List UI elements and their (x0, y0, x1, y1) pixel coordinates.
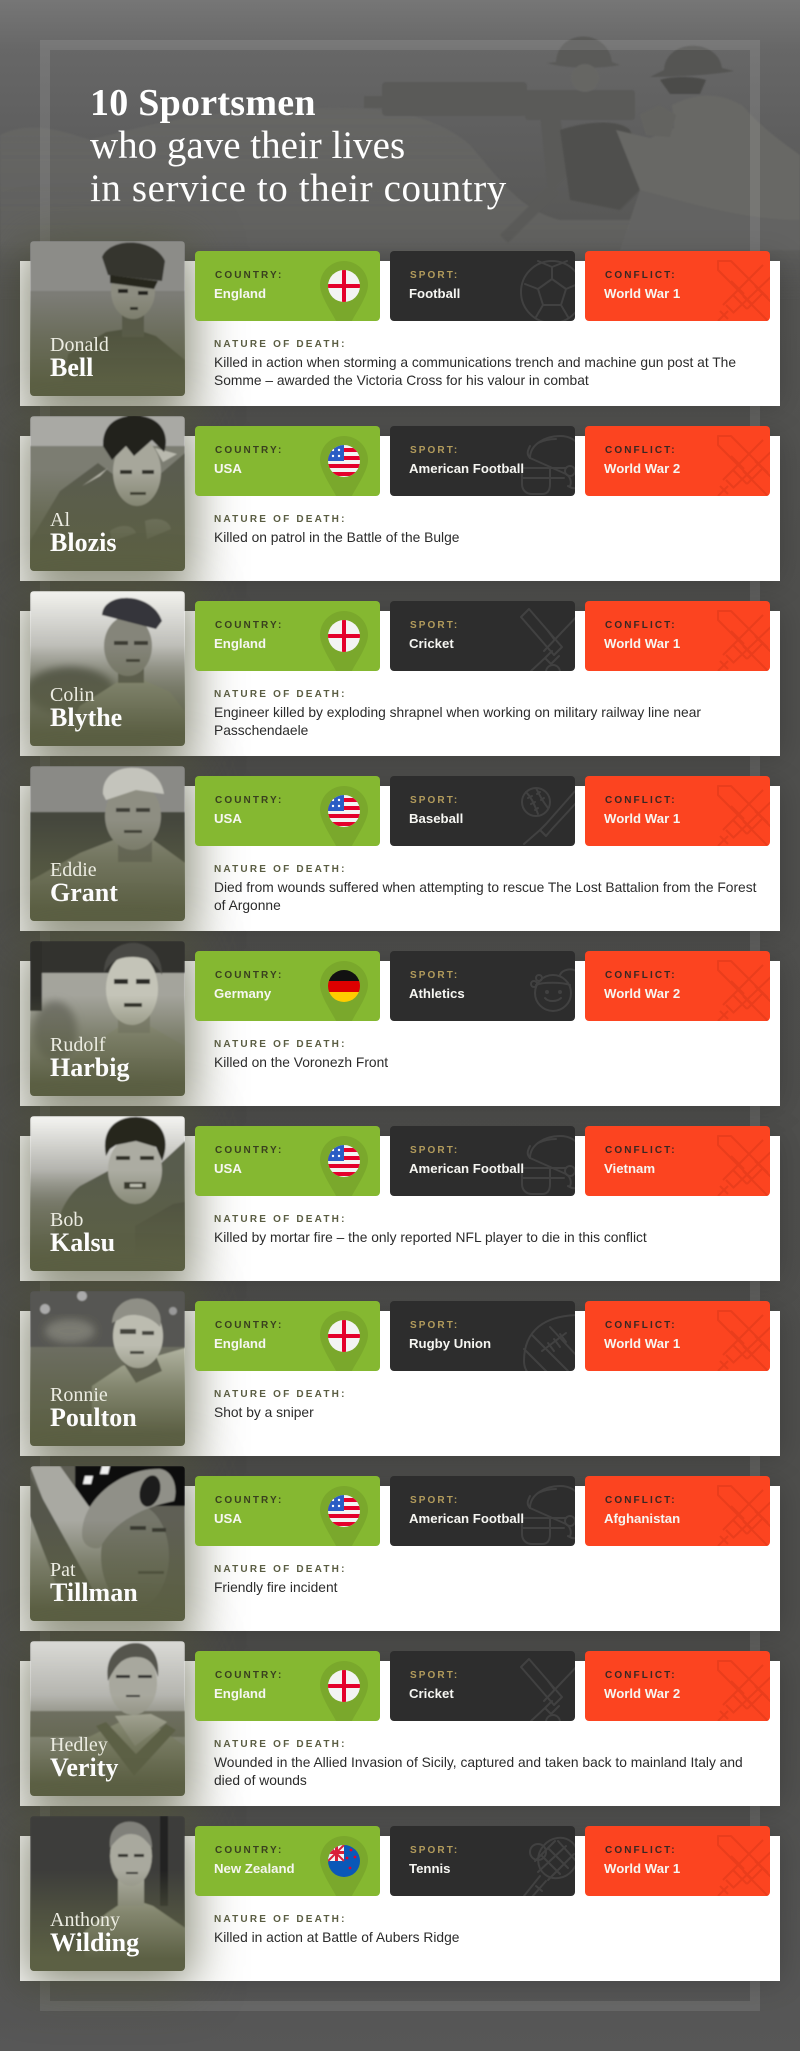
nature of death label: NATURE OF DEATH: (214, 514, 347, 525)
portrait: Rudolf Harbig: Harbig (50, 1053, 129, 1082)
machine gun (364, 82, 635, 243)
conflict tile: World War 1 (604, 636, 680, 651)
soldier one (547, 36, 650, 210)
portrait: Donald Bell (30, 241, 185, 396)
sport tile: Tennis (409, 1861, 451, 1876)
panel: Ronnie Poulton (10, 1266, 782, 1466)
portrait: Anthony Wilding (30, 1816, 185, 1971)
title: in service to their country (90, 167, 507, 210)
country tile: COUNTRY: (215, 445, 283, 456)
sport tile: Cricket (409, 1686, 454, 1701)
sport tile: Rugby Union (409, 1336, 491, 1351)
nature of death text: Died from wounds suffered when attempting to rescue The Lost Battalion from the Forest (214, 880, 756, 895)
conflict tile: CONFLICT: (605, 445, 677, 456)
conflict tile: World War 1 (604, 286, 680, 301)
conflict tile: CONFLICT: (605, 1145, 677, 1156)
country tile (195, 1476, 380, 1546)
background photograph: machine gun soldiers (0, 36, 800, 252)
conflict tile: CONFLICT: (605, 795, 677, 806)
panel: Bob Kalsu (10, 1080, 782, 1291)
country tile: Germany (214, 986, 271, 1001)
conflict tile (585, 426, 770, 496)
country tile (195, 1126, 380, 1196)
portrait: Pat Tillman (30, 1466, 185, 1621)
country tile (195, 601, 380, 671)
sport tile (390, 1476, 575, 1546)
sport tile (390, 426, 575, 496)
name: Colin (50, 684, 94, 706)
conflict tile (585, 951, 770, 1021)
nature of death text: Killed on the Voronezh Front (214, 1055, 388, 1070)
sport tile (390, 1651, 575, 1721)
conflict tile: CONFLICT: (605, 970, 677, 981)
country tile (195, 951, 380, 1021)
nature of death label: NATURE OF DEATH: (214, 1214, 347, 1225)
nature of death label: NATURE OF DEATH: (214, 864, 347, 875)
name: Hedley (50, 1734, 108, 1756)
nature of death text: Wounded in the Allied Invasion of Sicily, captured and taken back to mainland Italy and (214, 1755, 743, 1770)
nature of death text: Passchendaele (214, 723, 308, 738)
panel: Pat Tillman (10, 1441, 781, 1641)
country tile: England (214, 286, 266, 301)
sport tile: Athletics (409, 986, 465, 1001)
conflict tile: CONFLICT: (605, 1320, 677, 1331)
portrait: Donald Bell: Bell (50, 353, 93, 382)
country tile: COUNTRY: (215, 1495, 283, 1506)
conflict tile (585, 601, 770, 671)
title (90, 82, 507, 210)
nature of death label: NATURE OF DEATH: (214, 1039, 347, 1050)
title: 10 Sportsmen (90, 82, 316, 124)
sport tile: SPORT: (410, 1495, 459, 1506)
nature of death text (214, 355, 736, 388)
name: Eddie (50, 859, 97, 881)
conflict tile: World War 1 (604, 811, 680, 826)
panel: Donald Bell (6, 225, 783, 416)
panel: Eddie Grant (10, 730, 782, 941)
sport tile: Football (409, 286, 460, 301)
country tile: COUNTRY: (215, 620, 283, 631)
name: Ronnie (50, 1384, 108, 1406)
name: Al (50, 509, 70, 531)
country tile: England (214, 1686, 266, 1701)
nature of death label: NATURE OF DEATH: (214, 339, 347, 350)
conflict tile (585, 1826, 770, 1896)
name: Anthony (50, 1909, 120, 1931)
portrait: Ronnie Poulton (30, 1291, 185, 1446)
portrait: Ronnie Poulton: Poulton (50, 1403, 137, 1432)
nature of death text: Engineer killed by exploding shrapnel when working on military railway line near (214, 705, 701, 720)
sport tile: Baseball (409, 811, 463, 826)
portrait: Anthony Wilding: Wilding (50, 1928, 139, 1957)
nature of death text: Shot by a sniper (214, 1405, 314, 1420)
conflict tile: CONFLICT: (605, 1670, 677, 1681)
sport tile (390, 1301, 575, 1371)
sport tile (390, 776, 575, 846)
country tile: COUNTRY: (215, 270, 283, 281)
conflict tile: CONFLICT: (605, 1495, 677, 1506)
portrait: Al Blozis (30, 416, 185, 571)
country tile (195, 1651, 380, 1721)
nature of death label: NATURE OF DEATH: (214, 1389, 347, 1400)
nature of death text: Killed in action when storming a communications trench and machine gun post at The (214, 355, 736, 370)
sport tile (390, 251, 575, 321)
conflict tile: World War 2 (604, 986, 680, 1001)
country tile: USA (214, 1161, 242, 1176)
panel: Colin Blythe (10, 566, 782, 766)
portrait: Hedley Verity (30, 1641, 185, 1796)
country tile: COUNTRY: (215, 1145, 283, 1156)
country tile: COUNTRY: (215, 1670, 283, 1681)
conflict tile: World War 1 (604, 1861, 680, 1876)
country tile: USA (214, 1511, 242, 1526)
country tile (195, 426, 380, 496)
country tile: COUNTRY: (215, 1320, 283, 1331)
panel: Al Blozis (9, 391, 782, 591)
sport tile: SPORT: (410, 445, 459, 456)
country tile: USA (214, 461, 242, 476)
portrait: Colin Blythe (30, 591, 185, 746)
country tile: England (214, 636, 266, 651)
conflict tile (585, 1651, 770, 1721)
conflict tile (585, 1301, 770, 1371)
country tile (195, 1826, 380, 1896)
nature of death text: Friendly fire incident (214, 1580, 337, 1595)
portrait: Bob Kalsu: Kalsu (50, 1228, 115, 1257)
conflict tile (585, 1126, 770, 1196)
portrait: Colin Blythe: Blythe (50, 703, 122, 732)
nature of death label: NATURE OF DEATH: (214, 1564, 347, 1575)
sport tile: American Football (409, 461, 524, 476)
title: who gave their lives (90, 124, 405, 167)
nature of death text: Killed in action at Battle of Aubers Ridge (214, 1930, 459, 1945)
panel: Rudolf Harbig (10, 916, 782, 1116)
nature of death text: Killed on patrol in the Battle of the Bulge (214, 530, 459, 545)
nature of death text: of Argonne (214, 898, 281, 913)
conflict tile: CONFLICT: (605, 270, 677, 281)
nature of death text: Killed by mortar fire – the only reported NFL player to die in this conflict (214, 1230, 647, 1245)
portrait: Pat Tillman: Tillman (50, 1578, 138, 1607)
sport tile (390, 951, 575, 1021)
name: Bob (50, 1209, 83, 1231)
conflict tile (585, 251, 770, 321)
country tile: COUNTRY: (215, 1845, 283, 1856)
sport tile: American Football (409, 1161, 524, 1176)
sport tile: SPORT: (410, 270, 459, 281)
conflict tile: CONFLICT: (605, 620, 677, 631)
portrait: Hedley Verity: Verity (50, 1753, 118, 1782)
portrait: Eddie Grant: Grant (50, 878, 118, 907)
conflict tile: World War 2 (604, 461, 680, 476)
nature of death label: NATURE OF DEATH: (214, 1914, 347, 1925)
conflict tile: World War 1 (604, 1336, 680, 1351)
sport tile: SPORT: (410, 620, 459, 631)
name: Donald (50, 334, 109, 356)
country tile (195, 776, 380, 846)
panel: Hedley Verity (10, 1616, 782, 1816)
name: Pat (50, 1559, 76, 1581)
conflict tile: Afghanistan (604, 1511, 680, 1526)
sport tile (390, 1826, 575, 1896)
country tile: COUNTRY: (215, 795, 283, 806)
nature of death label: NATURE OF DEATH: (214, 1739, 347, 1750)
nature of death text (214, 705, 701, 738)
sport tile: SPORT: (410, 970, 459, 981)
sport tile: SPORT: (410, 1845, 459, 1856)
nature of death text (214, 880, 756, 913)
country tile: COUNTRY: (215, 970, 283, 981)
conflict tile: CONFLICT: (605, 1845, 677, 1856)
portrait: Eddie Grant (30, 766, 185, 921)
country tile (195, 251, 380, 321)
panel: Anthony Wilding (6, 1780, 782, 2006)
country tile: New Zealand (214, 1861, 295, 1876)
sport tile: SPORT: (410, 1670, 459, 1681)
sport tile: American Football (409, 1511, 524, 1526)
conflict tile: Vietnam (604, 1161, 655, 1176)
sport tile (390, 601, 575, 671)
nature of death text (214, 1755, 743, 1788)
name: Rudolf (50, 1034, 106, 1056)
sport tile: SPORT: (410, 1320, 459, 1331)
portrait: Bob Kalsu (30, 1116, 185, 1271)
nature of death label: NATURE OF DEATH: (214, 689, 347, 700)
trench hills (0, 108, 800, 300)
sport tile (390, 1126, 575, 1196)
portrait: Al Blozis: Blozis (50, 528, 116, 557)
sport tile: Cricket (409, 636, 454, 651)
country tile: USA (214, 811, 242, 826)
country tile: England (214, 1336, 266, 1351)
nature of death text: died of wounds (214, 1773, 307, 1788)
sport tile: SPORT: (410, 795, 459, 806)
conflict tile: World War 2 (604, 1686, 680, 1701)
conflict tile (585, 1476, 770, 1546)
soldier two (616, 46, 800, 250)
conflict tile (585, 776, 770, 846)
nature of death text: Somme – awarded the Victoria Cross for his valour in combat (214, 373, 589, 388)
country tile (195, 1301, 380, 1371)
portrait: Rudolf Harbig (30, 941, 185, 1096)
sport tile: SPORT: (410, 1145, 459, 1156)
